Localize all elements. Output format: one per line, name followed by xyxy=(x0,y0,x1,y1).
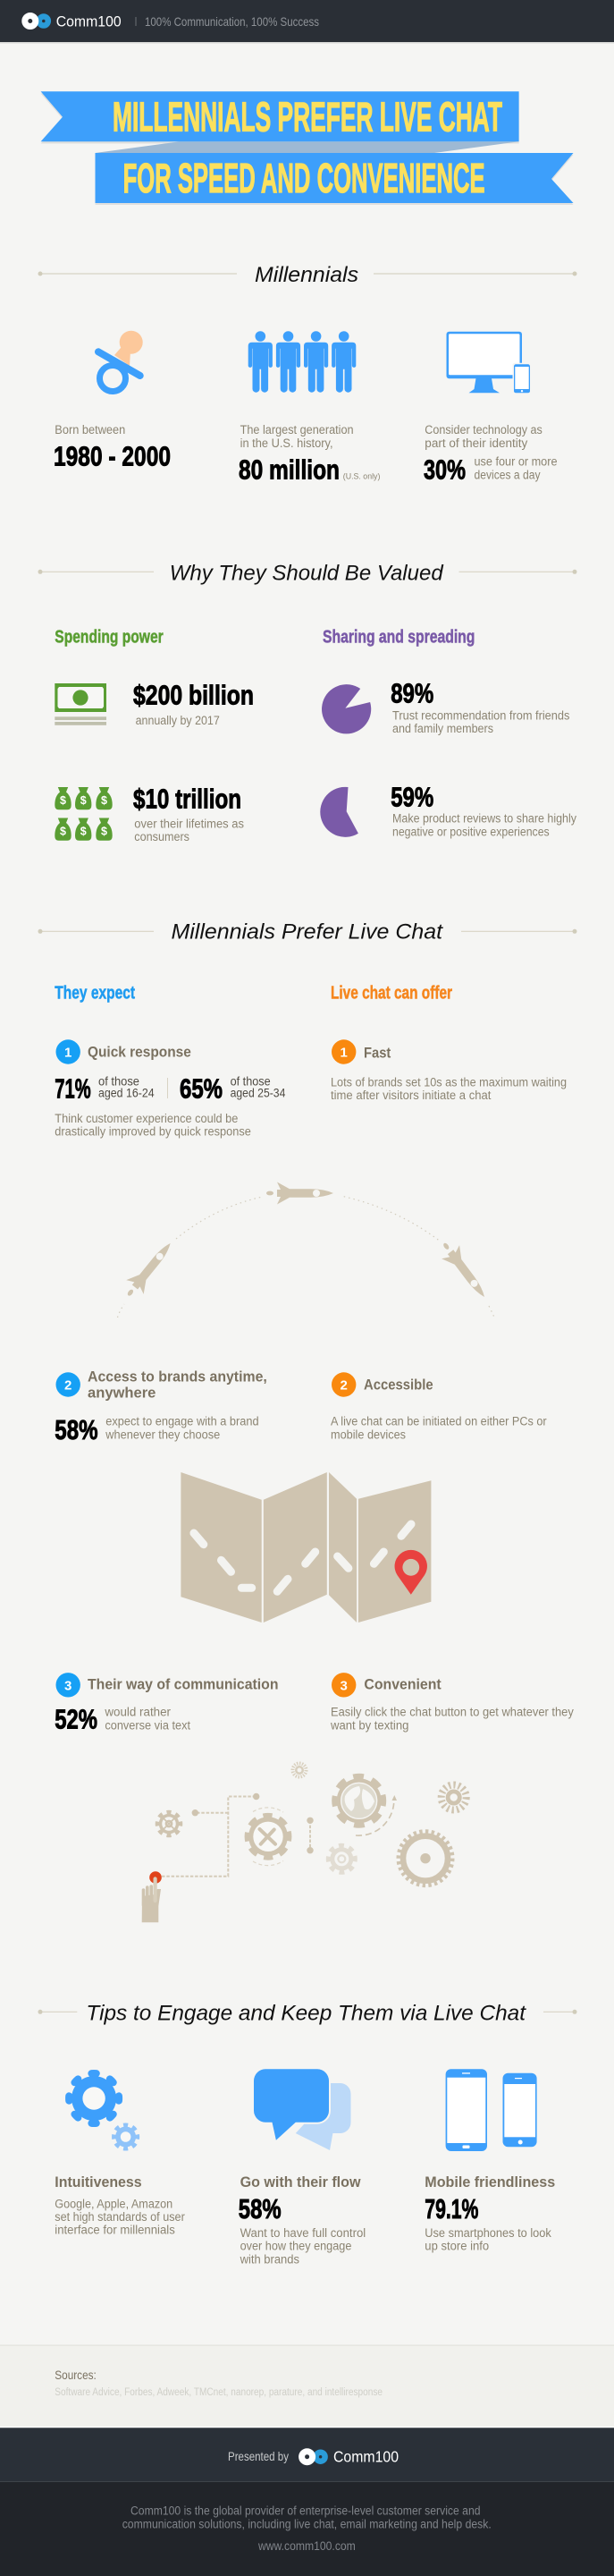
subheading: sharing and spreading: Sharing and spreading xyxy=(323,627,475,647)
text: technology identity: 30% xyxy=(424,453,466,485)
item 3: convenient: Easily click the chat button to get whatever they xyxy=(331,1706,574,1719)
item 3: way of communication: 3 xyxy=(64,1678,71,1693)
icon: chat bubbles xyxy=(254,2069,351,2150)
item 1: quick response: 71% xyxy=(55,1072,91,1104)
heading: Millennials: Millennials xyxy=(255,263,358,287)
heading: Tips to Engage: Tips to Engage and Keep Them via Live Chat xyxy=(86,2001,526,2025)
stat: 10 trillion: consumers xyxy=(134,830,189,843)
item 1: quick response: Quick response xyxy=(88,1044,191,1061)
icon: pale gear xyxy=(328,1845,355,1872)
icon: sun gear xyxy=(442,1785,467,1810)
ribbon 1 xyxy=(41,91,519,141)
header bar xyxy=(0,0,614,43)
tip: go with their flow: Go with their flow xyxy=(240,2174,361,2190)
title ribbons xyxy=(41,91,574,205)
icon: Comm100 logo xyxy=(302,2452,325,2462)
illustration: hand pressing button and gears xyxy=(142,1764,467,1922)
stat: 59 percent xyxy=(391,782,576,838)
tip: mobile friendliness: Mobile friendliness xyxy=(425,2174,555,2190)
stat: 200 billion: $200 billion xyxy=(133,680,254,711)
stat: 59 percent: 59% xyxy=(391,782,433,813)
panel: presented by: Presented by xyxy=(228,2449,289,2463)
icon: money bags: $ xyxy=(80,794,87,807)
item 2: accessible: 2 xyxy=(341,1377,348,1394)
item 2: accessible: Accessible xyxy=(364,1376,433,1393)
text: largest generation: in the U.S. history, xyxy=(240,436,333,450)
icon: money bags: $ xyxy=(60,794,66,807)
heading: Millennials Prefer Live Chat: Millennials Prefer Live Chat xyxy=(172,919,443,944)
panel: company description: communication solutions, including live chat, email marketing and help desk. xyxy=(122,2517,492,2530)
item 1: fast: 1 xyxy=(341,1045,348,1061)
tip: mobile friendliness xyxy=(425,2174,555,2253)
tip: intuitiveness: set high standards of user xyxy=(55,2210,185,2224)
heading: Millennials Prefer Live Chat xyxy=(38,919,577,944)
panel: company description xyxy=(0,2482,614,2576)
tip: go with their flow xyxy=(239,2174,366,2266)
brand name: Comm100 xyxy=(56,13,122,30)
item 3: convenient: 3 xyxy=(341,1678,348,1693)
item 3: convenient xyxy=(330,1673,574,1733)
icon: red button and hand xyxy=(142,1871,162,1922)
panel: company description: www.comm100.com xyxy=(257,2539,356,2553)
item 2: accessible: mobile devices xyxy=(331,1428,406,1441)
icon: four people xyxy=(248,331,356,393)
panel: millennials prefer live chat xyxy=(38,919,577,1922)
stat: 10 trillion: over their lifetimes as xyxy=(134,817,244,830)
stat: 89 percent: 89% xyxy=(391,678,433,709)
icon: pie chart 59 percent xyxy=(320,787,358,837)
icon: banknote xyxy=(55,683,106,725)
heading: Why They Should Be Valued xyxy=(38,561,577,585)
item 3: way of communication: Their way of communication xyxy=(88,1675,279,1692)
item 1: fast: Fast xyxy=(364,1045,391,1062)
text: technology identity xyxy=(424,423,558,485)
item 2: access to brands xyxy=(55,1368,267,1445)
item 1: quick response: Think customer experience could be xyxy=(55,1112,238,1125)
icon: pacifier xyxy=(98,331,143,392)
panel: why they should be valued xyxy=(38,561,577,843)
text: largest generation: (U.S. only) xyxy=(343,472,380,482)
item 1: quick response: drastically improved by quick response xyxy=(55,1125,251,1139)
icon: tiny sun gear xyxy=(293,1764,306,1776)
icon: money bags xyxy=(55,787,113,841)
tip: go with their flow: with brands xyxy=(240,2252,299,2266)
stat: 200 billion xyxy=(133,680,254,727)
item 2: access to brands: 58% xyxy=(55,1414,98,1445)
icon: large toothed gear xyxy=(399,1832,452,1885)
icon: money bags: $ xyxy=(80,825,87,837)
panel: sources: Software Advice, Forbes, Adweek, TMCnet, nanorep, parature, and intelliresponse xyxy=(55,2387,383,2398)
stat: 89 percent xyxy=(391,678,570,735)
tip: go with their flow: 58% xyxy=(239,2193,282,2224)
stat: 89 percent: Trust recommendation from friends xyxy=(392,708,570,722)
item 2: accessible xyxy=(331,1372,547,1441)
panel: company description: Comm100 is the global provider of enterprise-level customer service and xyxy=(130,2504,481,2518)
text: born between: Born between xyxy=(55,423,125,436)
icon: monitor and phone xyxy=(447,332,531,394)
item 1: fast: time after visitors initiate a chat xyxy=(331,1089,492,1102)
stat: 59 percent: Make product reviews to share highly xyxy=(392,812,576,826)
tip: intuitiveness: Intuitiveness xyxy=(55,2174,142,2190)
stat: 89 percent: and family members xyxy=(392,722,493,735)
text: largest generation: The largest generation xyxy=(240,423,354,436)
item 1: quick response xyxy=(55,1039,286,1139)
icon: money bags: $ xyxy=(101,825,107,837)
item 3: way of communication xyxy=(55,1673,278,1735)
tagline: 100% Communication, 100% Success xyxy=(145,14,319,29)
tip: mobile friendliness: Use smartphones to look xyxy=(425,2226,551,2240)
icon: pie chart 89 percent xyxy=(322,684,371,733)
icon: wrench gear xyxy=(248,1808,289,1866)
stat: 200 billion: annually by 2017 xyxy=(136,714,220,727)
dashed connectors xyxy=(162,1796,310,1877)
item 2: access to brands: anywhere xyxy=(88,1385,156,1402)
text: largest generation: 80 million xyxy=(239,453,340,485)
item 1: quick response: 1 xyxy=(64,1045,71,1061)
item 1: quick response: 65% xyxy=(180,1072,223,1104)
text: born between xyxy=(54,423,171,472)
tip: intuitiveness: interface for millennials xyxy=(55,2224,175,2237)
icon: globe gear xyxy=(335,1777,397,1835)
item 2: access to brands: 2 xyxy=(64,1377,71,1394)
item 1: quick response: of those xyxy=(231,1074,271,1088)
text: technology identity: part of their identity xyxy=(425,436,528,450)
item 1: quick response: aged 16-24 xyxy=(98,1087,155,1100)
panel: presented by: Comm100 xyxy=(333,2447,399,2465)
text: technology identity: devices a day xyxy=(474,468,541,481)
item 2: access to brands: Access to brands anytime, xyxy=(88,1368,267,1385)
tip: go with their flow: over how they engage xyxy=(240,2240,351,2253)
item 3: way of communication: 52% xyxy=(55,1704,97,1735)
item 2: access to brands: expect to engage with a brand xyxy=(105,1415,259,1428)
stat: 10 trillion xyxy=(133,783,244,843)
panel: tips to engage xyxy=(38,2001,577,2266)
text: technology identity: Consider technology as xyxy=(425,423,543,436)
item 3: convenient: Convenient xyxy=(364,1675,442,1692)
stat: 59 percent: negative or positive experiences xyxy=(392,825,550,838)
tip: mobile friendliness: up store info xyxy=(425,2240,489,2253)
subheading: live chat can offer: Live chat can offer xyxy=(331,984,452,1004)
illustration: rockets on dotted arc xyxy=(118,1182,495,1319)
icon: money bags: $ xyxy=(101,794,107,807)
text: largest generation xyxy=(239,423,380,485)
subheading: spending power: Spending power xyxy=(55,627,164,647)
panel: sources xyxy=(0,2345,614,2428)
tip: intuitiveness xyxy=(55,2174,185,2237)
panel: sources: Sources: xyxy=(55,2368,97,2382)
icon: small gear xyxy=(157,1812,181,1835)
panel: presented by xyxy=(0,2428,614,2482)
icon: map pin xyxy=(395,1550,427,1595)
panel: millennials xyxy=(38,263,577,485)
item 3: way of communication: would rather xyxy=(104,1706,171,1719)
tip: go with their flow: Want to have full control xyxy=(240,2226,366,2240)
text: technology identity: use four or more xyxy=(474,455,558,469)
heading: Millennials xyxy=(38,263,577,287)
item 1: fast xyxy=(331,1039,567,1102)
text: born between: 1980 - 2000 xyxy=(54,441,171,472)
item 2: accessible: A live chat can be initiated on either PCs or xyxy=(331,1415,547,1428)
illustration: folded map with pin xyxy=(181,1472,431,1623)
subheading: they expect: They expect xyxy=(55,984,135,1004)
item 1: quick response: aged 25-34 xyxy=(231,1087,286,1100)
item 1: fast: Lots of brands set 10s as the maximum waiting xyxy=(331,1075,567,1089)
item 3: convenient: want by texting xyxy=(330,1719,408,1733)
tip: mobile friendliness: 79.1% xyxy=(425,2193,478,2224)
icon: Comm100 logo xyxy=(25,16,48,27)
icon: blue gears xyxy=(69,2073,138,2148)
item 3: way of communication: converse via text xyxy=(105,1719,190,1733)
icon: money bags: $ xyxy=(60,825,66,837)
icon: smartphones xyxy=(446,2069,537,2151)
stat: 10 trillion: $10 trillion xyxy=(133,783,241,814)
item 2: access to brands: whenever they choose xyxy=(105,1428,220,1441)
item 1: quick response: of those xyxy=(98,1074,139,1088)
heading: Why They Should Be Valued: Why They Should Be Valued xyxy=(170,561,443,585)
tip: intuitiveness: Google, Apple, Amazon xyxy=(55,2197,172,2210)
